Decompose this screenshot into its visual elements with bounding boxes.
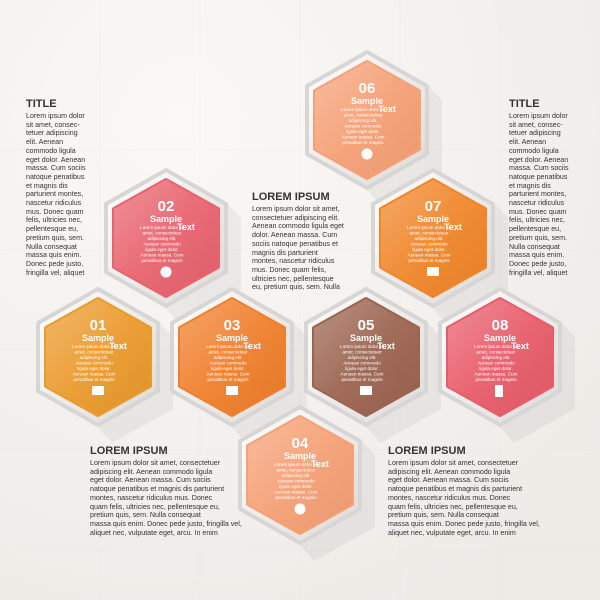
hexagon 04: penatibus et magnis: [275, 495, 317, 500]
text block: center lorem ipsum: [252, 191, 354, 512]
text block: left title: elit. Aenean: [26, 138, 63, 146]
text block: center lorem ipsum: Lorem ipsum dolor sit amet,: [252, 205, 340, 213]
hexagon 01: Text: [109, 341, 127, 351]
text block: left title: commodo ligula: [26, 147, 76, 155]
hexagon 07: adipiscing elit.: [415, 236, 443, 241]
text block: left title: parturient montes,: [26, 190, 83, 198]
text block: bottom right lorem ipsum: quam felis, ultricies nec, pellentesque eu,: [388, 503, 518, 511]
hexagon 03: 03: [224, 317, 240, 334]
text block: bottom right lorem ipsum: adipiscing elit. Aenean commodo ligula: [388, 468, 510, 476]
hexagon 07: Aenean massa. Cum: [408, 252, 451, 258]
text block: bottom left lorem ipsum: pretium quis, sem. Nulla consequat: [90, 511, 201, 519]
hexagon 06: ligula eget dolor.: [346, 129, 380, 134]
text block: left title: pellentesque eu,: [26, 225, 78, 233]
hexagon 06: adipiscing elit.: [349, 118, 377, 123]
hexagon 07: 07: [425, 198, 441, 215]
text block: center lorem ipsum: montes, nascetur ridiculus: [252, 257, 334, 265]
text block: center lorem ipsum: dolor. Aenean massa. Cum: [252, 231, 337, 239]
hexagon 02: Lorem ipsum dolor sit: [140, 225, 185, 230]
text block: right title: nascetur ridiculus: [509, 199, 564, 207]
hexagon 04: Sample: [284, 451, 316, 461]
hexagon 04: adipiscing elit.: [282, 473, 310, 478]
hexagon 01: ligula eget dolor.: [77, 366, 111, 371]
hexagon 01: penatibus et magnis: [73, 377, 115, 382]
hexagon 03: amet, consectetuer: [208, 350, 248, 354]
text block: bottom right lorem ipsum: eget dolor. Aenean massa. Cum sociis: [388, 476, 509, 484]
hexagon 04: Lorem ipsum dolor sit: [274, 462, 319, 467]
hexagon 03: Aenean commodo: [209, 360, 247, 366]
text block: center lorem ipsum: sociis natoque penatibus et: [252, 240, 338, 248]
text block: right title: Lorem ipsum dolor: [509, 112, 568, 120]
text block: left title: et magnis dis: [26, 182, 68, 190]
text block: right title: elit. Aenean: [509, 138, 546, 146]
text block: center lorem ipsum: magnis dis parturient: [252, 249, 318, 257]
hexagon 04: 04: [292, 435, 309, 452]
hexagon 07: Aenean commodo: [410, 242, 448, 246]
text block: right title: parturient montes,: [509, 190, 566, 198]
text block: right title: Nulla consequat: [509, 243, 560, 251]
hexagon 08: Text: [511, 341, 529, 351]
hexagon 03: adipiscing elit.: [214, 355, 242, 360]
text block: left title: fringilla vel, aliquet: [26, 269, 84, 277]
text block: right title: pretium quis, sem.: [509, 234, 567, 242]
text block: right title: et magnis dis: [509, 182, 551, 190]
hexagon 05: Text: [377, 341, 395, 351]
text block: right title: fringilla vel, aliquet: [509, 269, 567, 277]
hexagon 05: Lorem ipsum dolor sit: [340, 344, 385, 349]
text block: left title: tetuer adipiscing: [26, 129, 78, 137]
text block: left title: natoque penatibus: [26, 173, 84, 181]
text block: center lorem ipsum: LOREM IPSUM: [252, 191, 330, 203]
hexagon 08: ligula eget dolor.: [479, 366, 513, 371]
text block: left title: sit amet, consec-: [26, 121, 80, 129]
hexagon 03: Sample: [216, 333, 248, 343]
hexagon 05: Sample: [350, 333, 382, 343]
text block: bottom left lorem ipsum: Lorem ipsum dolor sit amet, consectetuer: [90, 459, 220, 467]
text block: center lorem ipsum: ultricies nec, pellentesque: [252, 275, 334, 283]
text block: bottom left lorem ipsum: aliquet nec, vulputate eget, arcu. In enim: [90, 529, 218, 537]
hexagon 02: ligula eget dolor.: [145, 247, 179, 252]
text block: right title: eget dolor. Aenean: [509, 156, 568, 164]
hexagon 04: ligula eget dolor.: [279, 484, 313, 489]
hexagon 06: [307, 52, 427, 188]
text block: bottom right lorem ipsum: massa quis enim. Donec pede justo, fringilla vel,: [388, 520, 540, 528]
hexagon 01: Aenean commodo: [75, 360, 113, 366]
hexagon 02: Text: [177, 222, 195, 232]
text block: left title: TITLE: [26, 98, 57, 110]
hexagon 04: Text: [311, 459, 329, 469]
hexagon 03: penatibus et magnis: [207, 377, 249, 382]
hexagon 02: 02: [158, 198, 174, 215]
hexagon 02: adipiscing elit.: [148, 236, 176, 241]
hexagon 07: Text: [444, 222, 462, 232]
text block: center lorem ipsum: consectetuer adipiscing elit.: [252, 214, 339, 222]
text block: bottom right lorem ipsum: aliquet nec, vulputate eget, arcu. In enim: [388, 529, 516, 537]
hexagon 08: amet, consectetuer: [476, 350, 516, 354]
hexagon 04: Aenean massa. Cum: [275, 490, 318, 494]
hexagon 01: Sample: [82, 333, 114, 343]
hexagon 06: amet, consectetuer: [343, 112, 383, 118]
text block: right title: tetuer adipiscing: [509, 129, 561, 137]
text block: left title: massa quis enim.: [26, 251, 81, 259]
hexagon 03: [172, 289, 292, 425]
hexagon 08: 08: [492, 317, 508, 334]
text block: bottom left lorem ipsum: natoque penatibus et magnis dis parturient: [90, 485, 224, 493]
text block: bottom left lorem ipsum: massa quis enim. Donec pede justo, fringilla vel,: [90, 520, 242, 528]
hexagon 05: penatibus et magnis: [341, 377, 383, 382]
hexagon 07: ligula eget dolor.: [412, 247, 446, 252]
text block: bottom right lorem ipsum: [388, 445, 540, 537]
hexagon 05: [306, 289, 426, 425]
hexagon 01: [38, 289, 158, 425]
hexagon 02: Aenean commodo: [143, 242, 181, 246]
hexagon 01: amet, consectetuer: [74, 350, 114, 354]
text block: left title: pretium quis, sem.: [26, 234, 84, 242]
hexagon 03: Lorem ipsum dolor sit: [206, 344, 251, 349]
hexagon 01: Lorem ipsum dolor sit: [72, 344, 117, 349]
text block: center lorem ipsum: mus. Donec quam felis,: [252, 266, 326, 274]
text block: bottom right lorem ipsum: pretium quis, sem. Nulla consequat: [388, 511, 499, 519]
hexagon 07: penatibus et magnis: [408, 258, 450, 263]
text block: right title: Donec pede justo,: [509, 260, 566, 268]
hexagon 02: amet, consectetuer: [142, 230, 182, 236]
hexagon 08: penatibus et magnis: [475, 377, 517, 382]
hexagon 01: adipiscing elit.: [80, 355, 108, 360]
hexagon 02: Aenean massa. Cum: [141, 252, 184, 258]
hexagon 01: Aenean massa. Cum: [73, 372, 116, 376]
text block: center lorem ipsum: Aenean commodo ligula eget: [252, 222, 344, 230]
hexagon 08: Aenean massa. Cum: [475, 372, 518, 376]
text block: bottom left lorem ipsum: adipiscing elit. Aenean commodo ligula: [90, 468, 212, 476]
hexagon 02: Sample: [150, 214, 182, 224]
hexagon 06: Text: [378, 104, 396, 114]
hexagon 04: amet, consectetuer: [276, 468, 316, 472]
hexagon 06: 06: [359, 80, 375, 97]
text block: bottom left lorem ipsum: montes, nascetur ridiculus mus. Donec: [90, 494, 212, 502]
text block: right title: natoque penatibus: [509, 173, 567, 181]
text block: right title: massa quis enim.: [509, 251, 564, 259]
text block: left title: [26, 98, 474, 293]
text block: bottom right lorem ipsum: Lorem ipsum dolor sit amet, consectetuer: [388, 459, 518, 467]
text block: left title: Donec pede justo,: [26, 260, 83, 268]
text block: right title: mus. Donec quam: [509, 208, 567, 216]
shadows: [37, 50, 575, 561]
text block: center lorem ipsum: eu, pretium quis, sem. Nulla: [252, 283, 340, 291]
text block: bottom left lorem ipsum: [90, 428, 348, 537]
text block: bottom right lorem ipsum: LOREM IPSUM: [388, 445, 466, 457]
hexagon 04: Aenean commodo: [277, 478, 315, 484]
hexagon 05: adipiscing elit.: [348, 355, 376, 360]
text block: bottom left lorem ipsum: quam felis, ultricies nec, pellentesque eu,: [90, 503, 220, 511]
text block: right title: TITLE: [509, 98, 540, 110]
text block: left title: massa. Cum sociis: [26, 164, 86, 172]
text block: left title: Lorem ipsum dolor: [26, 112, 85, 120]
text block: left title: nascetur ridiculus: [26, 199, 81, 207]
hexagon 05: ligula eget dolor.: [345, 366, 379, 371]
hexagon 05: 05: [358, 317, 374, 334]
hexagon 08: adipiscing elit.: [482, 355, 510, 360]
hexagon 02: penatibus et magnis: [141, 258, 183, 263]
hexagon 02: [106, 170, 226, 306]
hexagon 07: amet, consectetuer: [409, 230, 449, 236]
hexagon 06: penatibus et magnis: [342, 140, 384, 145]
text block: left title: felis, ultricies nec,: [26, 216, 82, 224]
text block: bottom right lorem ipsum: montes, nascetur ridiculus mus. Donec: [388, 494, 510, 502]
text block: right title: commodo ligula: [509, 147, 559, 155]
hexagon 08: Aenean commodo: [477, 360, 515, 366]
text block: left title: eget dolor. Aenean: [26, 156, 85, 164]
hexagon 06: Sample: [351, 96, 383, 106]
text block: right title: pellentesque eu,: [509, 225, 561, 233]
hexagon 05: Aenean commodo: [343, 360, 381, 366]
hexagon 07: Lorem ipsum dolor sit: [407, 225, 452, 230]
text block: left title: mus. Donec quam: [26, 208, 84, 216]
hexagon 05: amet, consectetuer: [342, 350, 382, 354]
hexagon 07: Sample: [417, 214, 449, 224]
hexagon 06: Aenean massa. Cum: [342, 134, 385, 140]
hexagon 01: 01: [90, 317, 106, 334]
hexagon 03: Text: [243, 341, 261, 351]
hexagon 04: [240, 407, 360, 543]
text block: bottom left lorem ipsum: LOREM IPSUM: [90, 445, 168, 457]
text block: right title: felis, ultricies nec,: [509, 216, 565, 224]
hexagon 08: Sample: [484, 333, 516, 343]
hexagon 07: [373, 170, 493, 306]
hexagon 08: Lorem ipsum dolor sit: [474, 344, 519, 349]
hexagon 08: [440, 289, 560, 425]
text block: right title: massa. Cum sociis: [509, 164, 569, 172]
hexagon 05: Aenean massa. Cum: [341, 372, 384, 376]
hexagon 03: ligula eget dolor.: [211, 366, 245, 371]
hexagon 03: Aenean massa. Cum: [207, 372, 250, 376]
text block: left title: Nulla consequat: [26, 243, 77, 251]
hexagon 06: Lorem ipsum dolor sit: [341, 107, 386, 112]
text block: bottom right lorem ipsum: natoque penatibus et magnis dis parturient: [388, 485, 522, 493]
text block: right title: [509, 98, 569, 277]
text block: bottom left lorem ipsum: eget dolor. Aenean massa. Cum sociis: [90, 476, 211, 484]
text block: right title: sit amet, consec-: [509, 121, 563, 129]
hexagon 06: Aenean commodo: [344, 124, 382, 128]
